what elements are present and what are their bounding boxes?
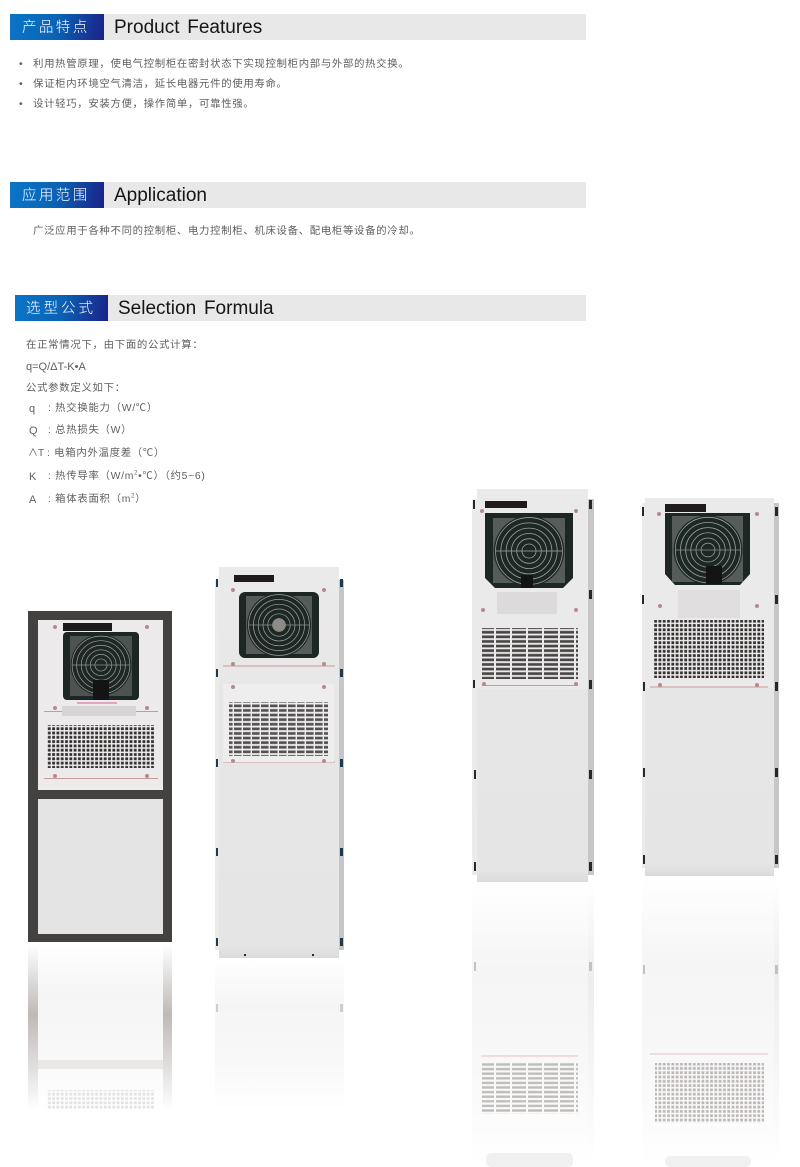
ventilation grid bbox=[47, 725, 155, 768]
logo plate bbox=[63, 623, 112, 631]
parameter definitions: q bbox=[29, 403, 35, 415]
heading bar: selection formula: Selection Formula bbox=[118, 298, 274, 319]
formula intro and equation bbox=[26, 339, 203, 394]
parameter definitions: : 热交换能力（W/℃） bbox=[48, 403, 158, 414]
louvers bbox=[229, 702, 328, 756]
parameter definitions bbox=[28, 402, 206, 506]
heading bar: product features: 产品特点 bbox=[22, 20, 90, 36]
product photo: cabinet 3 bbox=[472, 489, 594, 882]
section: product features bbox=[10, 14, 586, 110]
heading bar: application: Application bbox=[114, 185, 207, 206]
product photo: cabinet 4 bbox=[642, 498, 779, 876]
reflection: cabinet 2 bbox=[215, 960, 344, 1110]
parameter definitions: : 热传导率（W/m2•℃）（约5~6) bbox=[48, 471, 206, 482]
parameter definitions: A bbox=[29, 494, 36, 506]
parameter definitions: : 总热损失（W） bbox=[48, 425, 132, 436]
product photo: cabinet 1 with dark frame bbox=[28, 611, 172, 942]
fan window bbox=[485, 513, 573, 588]
reflection: cabinet 3 bbox=[472, 883, 594, 1167]
heading bar: product features: Product Features bbox=[114, 17, 262, 38]
section: application bbox=[10, 182, 586, 237]
formula intro and equation: 在正常情况下，由下面的公式计算： bbox=[26, 340, 203, 351]
heading bar: product features bbox=[10, 14, 586, 40]
heading bar: application bbox=[10, 182, 586, 208]
bullet list: features: • bbox=[19, 79, 23, 90]
bullet list: features bbox=[19, 58, 409, 110]
fan window bbox=[239, 592, 319, 658]
product photo: cabinet 2 bbox=[215, 567, 344, 958]
reflection: cabinet 1 bbox=[28, 945, 172, 1110]
parameter definitions: K bbox=[29, 471, 36, 483]
parameter definitions: : 电箱内外温度差（℃） bbox=[47, 448, 165, 459]
formula intro and equation: q=Q/ΔT-K•A bbox=[26, 361, 86, 373]
fan window bbox=[63, 632, 139, 700]
fan window bbox=[665, 513, 750, 585]
parameter definitions: : 箱体表面积（m2） bbox=[48, 494, 146, 505]
heading bar: application: 应用范围 bbox=[22, 188, 90, 204]
bullet list: features: 保证柜内环境空气清洁，延长电器元件的使用寿命。 bbox=[33, 79, 288, 90]
bullet list: features: • bbox=[19, 59, 23, 70]
ventilation grid bbox=[654, 620, 764, 678]
section: selection formula bbox=[15, 295, 586, 506]
text: application description: 广泛应用于各种不同的控制柜、电力控制柜、机床设备、配电柜等设备的冷却。 bbox=[33, 226, 420, 237]
bullet list: features: 利用热管原理，使电气控制柜在密封状态下实现控制柜内部与外部的热交换。 bbox=[33, 59, 409, 70]
bullet list: features: • bbox=[19, 99, 23, 110]
parameter definitions: ∧T bbox=[28, 448, 44, 459]
heading bar: selection formula: 选型公式 bbox=[26, 301, 96, 317]
reflection: cabinet 4 bbox=[642, 878, 779, 1167]
louvers bbox=[482, 628, 578, 679]
parameter definitions: Q bbox=[29, 425, 38, 437]
bullet list: features: 设计轻巧，安装方便，操作简单，可靠性强。 bbox=[33, 99, 254, 110]
formula intro and equation: 公式参数定义如下： bbox=[26, 383, 126, 394]
heading bar: selection formula bbox=[15, 295, 586, 321]
